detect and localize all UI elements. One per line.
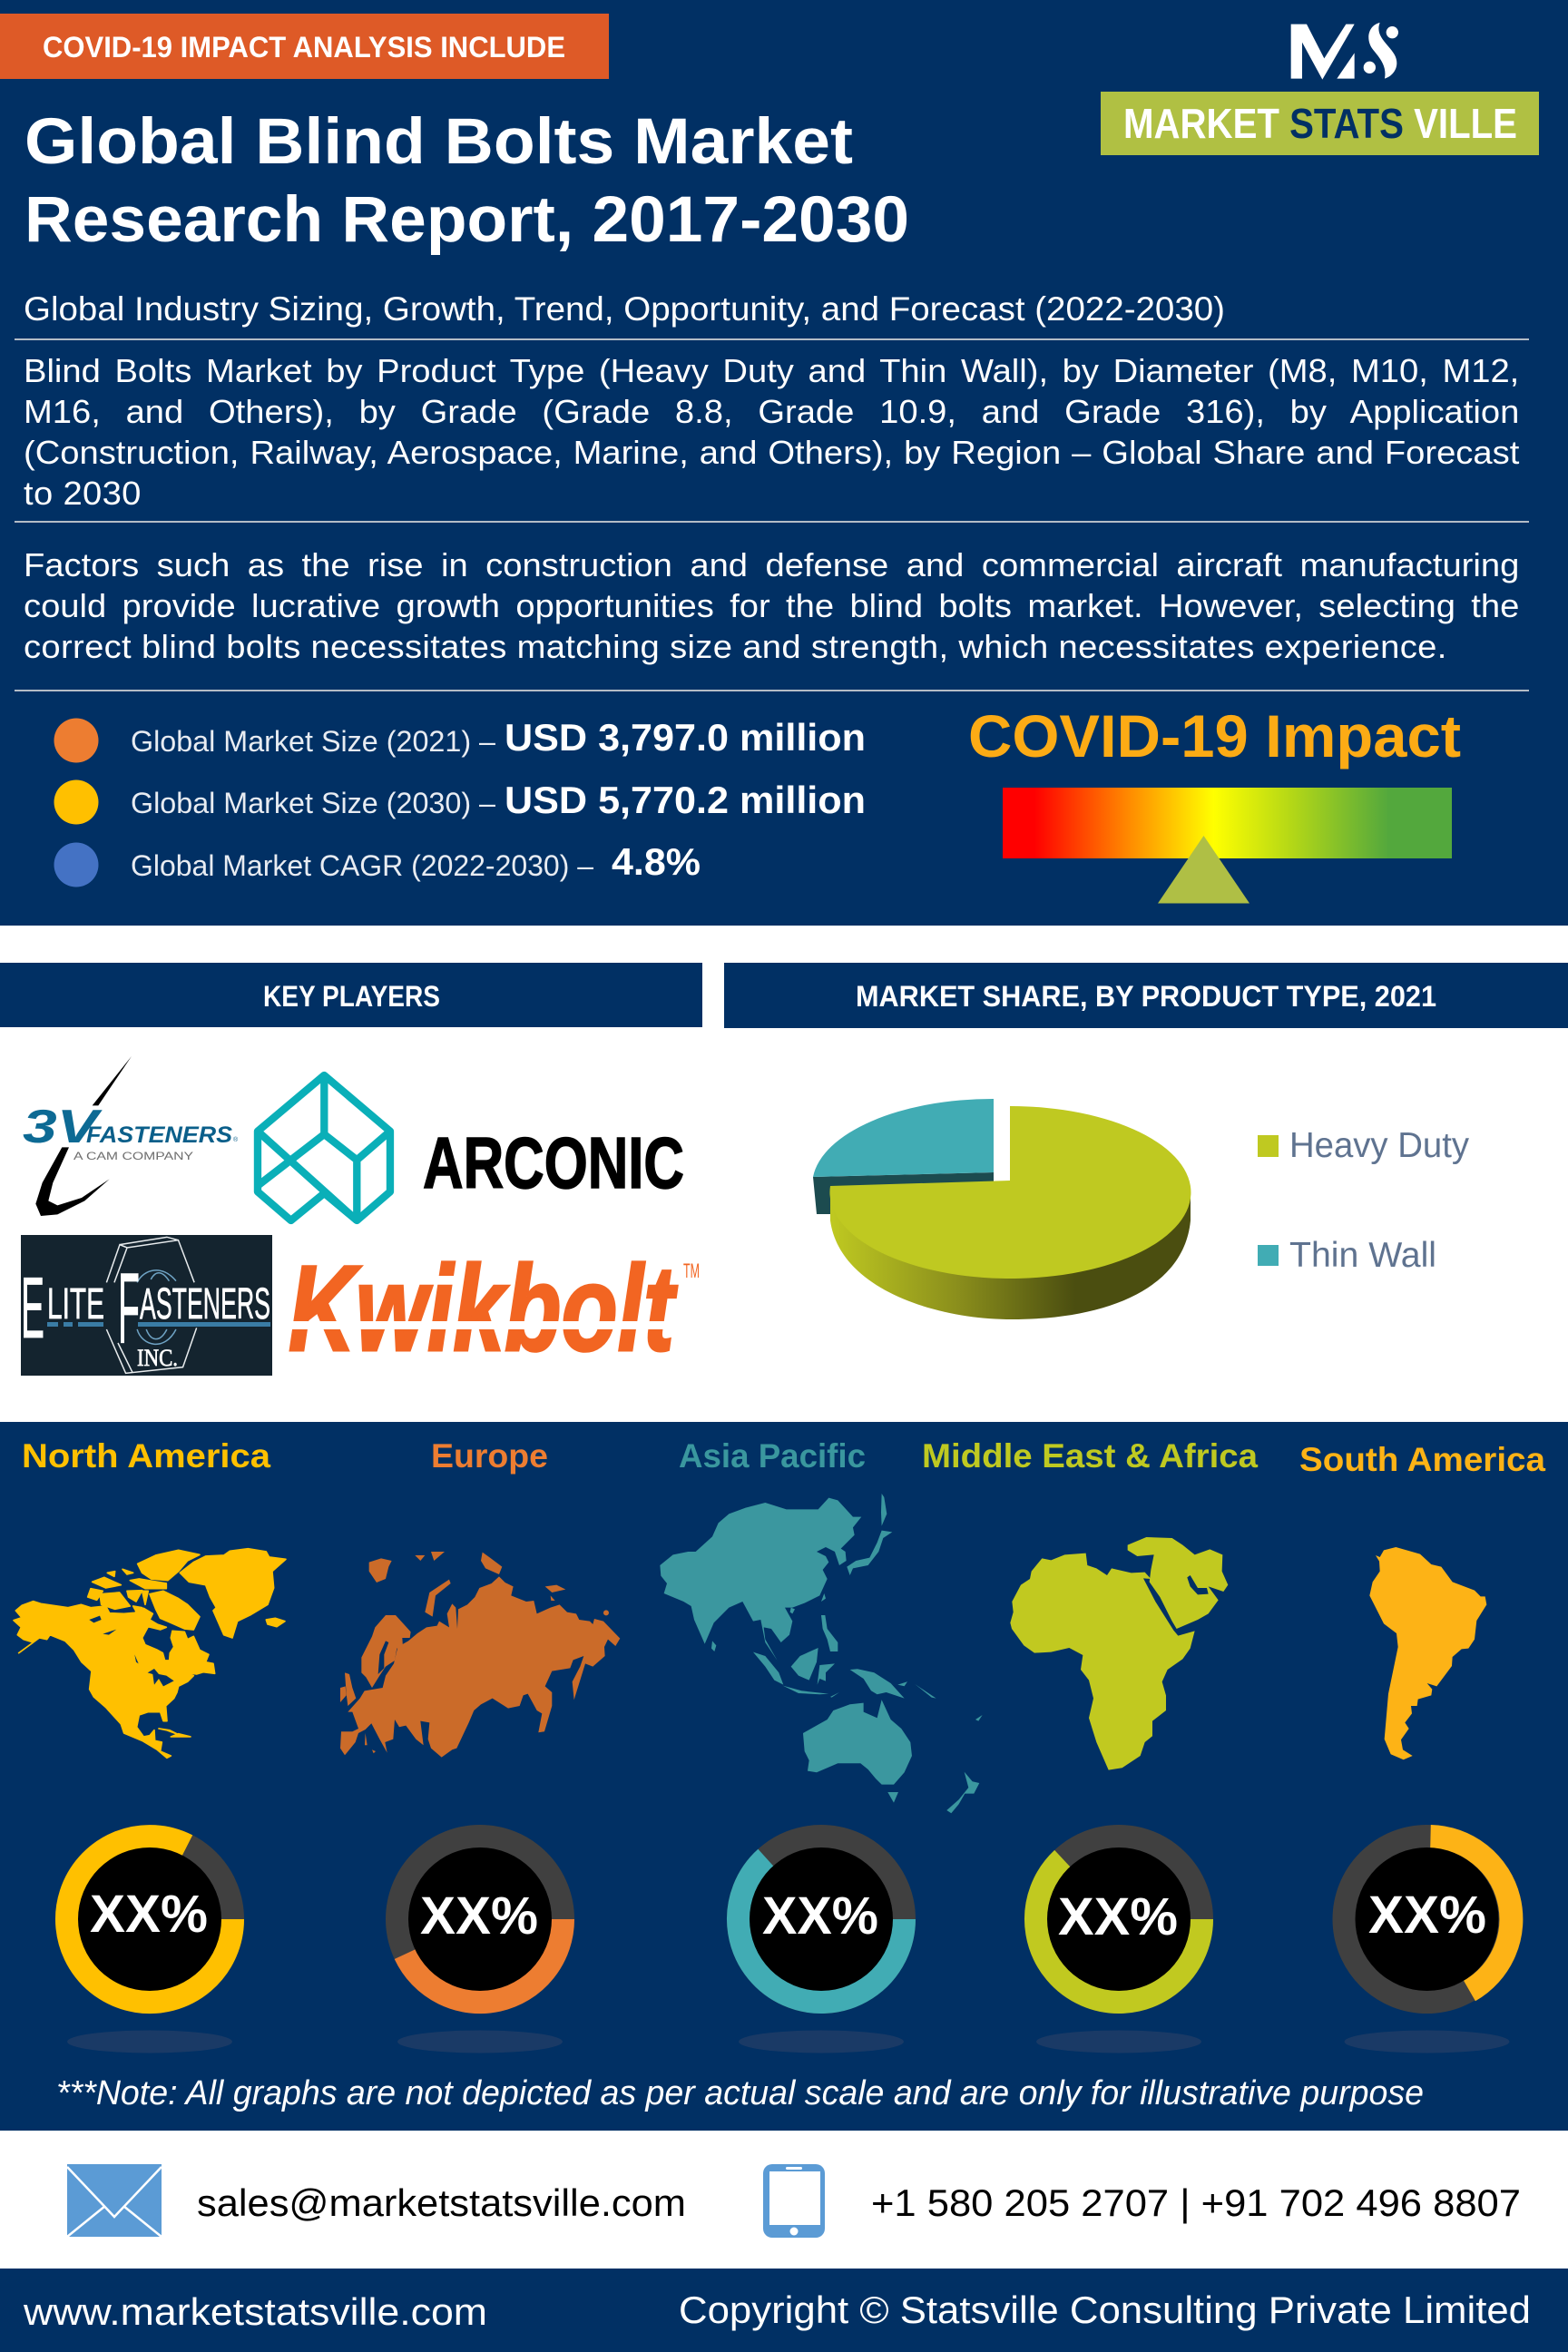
donut: Europe	[397, 1837, 563, 2002]
heading: North America: North America	[22, 1437, 270, 1475]
heading: South America: South America	[1299, 1441, 1545, 1478]
logo: Arconic: ARCONIC	[423, 1122, 684, 1203]
logo: 3V Fasteners: ®	[233, 1136, 239, 1143]
stat: market size 2030: USD 5,770.2 million	[505, 779, 866, 821]
key statistics	[54, 716, 866, 887]
text block: segmentation description	[24, 352, 1519, 512]
heading: Asia Pacific: Asia Pacific	[679, 1437, 866, 1475]
map: North America	[14, 1549, 286, 1758]
pie chart: market share by product type	[813, 1099, 1191, 1319]
map: Middle East and Africa	[1010, 1537, 1228, 1770]
text block: market factors	[24, 546, 1519, 665]
donut: Middle East and Africa	[1036, 1837, 1201, 2002]
icon: phone	[763, 2164, 825, 2238]
text block: market factors: could provide lucrative growth opportunities for the blind bolts market. However, selecting the	[24, 587, 1519, 624]
logo: 3V Fasteners: A CAM COMPANY	[74, 1150, 193, 1162]
text block: market factors: Factors such as the rise in construction and defense and commercial aircraft manufacturing	[24, 546, 1519, 583]
panel header: key players: KEY PLAYERS	[263, 980, 440, 1013]
covid-19 impact gauge	[968, 702, 1461, 904]
logo: 3V Fasteners	[23, 1056, 239, 1216]
donut: Asia Pacific	[739, 1837, 904, 2002]
logo: Elite Fasteners	[21, 1235, 272, 1376]
stat: market CAGR	[54, 840, 701, 887]
logo: 3V Fasteners: 3V	[23, 1101, 103, 1153]
panel header: key players	[0, 963, 702, 1027]
map: South America	[1369, 1547, 1486, 1759]
donut: Asia Pacific: XX%	[762, 1886, 878, 1945]
text block: segmentation description: Blind Bolts Market by Product Type (Heavy Duty and Thin Wall), by Diameter (M8, M10, M12,	[24, 352, 1519, 389]
donut: South America	[1345, 1837, 1511, 2002]
logo: Elite Fasteners: LITE	[47, 1280, 104, 1328]
legend: thin wall: Thin Wall	[1289, 1236, 1436, 1275]
donut shadows	[67, 2031, 1510, 2053]
donut: Middle East and Africa: XX%	[1058, 1887, 1178, 1946]
heading: Europe: Europe	[431, 1437, 548, 1475]
footer: copyright: Copyright © Statsville Consulting Private Limited	[679, 2288, 1531, 2331]
contact: phone numbers: +1 580 205 2707 | +91 702 496 8807	[871, 2181, 1521, 2224]
stat: market size 2021: USD 3,797.0 million	[505, 716, 866, 759]
pie slice: thin wall	[813, 1099, 994, 1214]
logo: Elite Fasteners: INC.	[137, 1345, 178, 1371]
text block: segmentation description: to 2030	[24, 475, 142, 512]
legend: heavy duty: Heavy Duty	[1289, 1126, 1469, 1165]
icon: email envelope	[67, 2164, 162, 2237]
regional panel background	[0, 1422, 1568, 2131]
note: ***Note: All graphs are not depicted as per actual scale and are only for illustrative purpose	[56, 2074, 1424, 2112]
logo: 3V Fasteners: FASTENERS	[86, 1122, 232, 1148]
logo: Elite Fasteners: F	[118, 1253, 140, 1365]
stat: market CAGR: 4.8%	[612, 840, 701, 883]
panel header: market share: MARKET SHARE, BY PRODUCT TYPE, 2021	[856, 980, 1436, 1013]
title: Global Blind Bolts Market	[24, 106, 853, 178]
donut: Europe: XX%	[420, 1886, 538, 1945]
map: Asia Pacific	[660, 1494, 983, 1813]
map: Europe	[340, 1552, 620, 1758]
stat: market CAGR: Global Market CAGR (2022-2030) –	[131, 849, 593, 882]
logo: Elite Fasteners: E	[21, 1259, 44, 1357]
text block: segmentation description: (Construction, Railway, Aerospace, Marine, and Others), by Region – Global Share and Forecast	[24, 434, 1519, 471]
logo: Kwikbolt: Kwikbolt	[289, 1241, 678, 1377]
logo: Market Stats Ville	[1101, 23, 1539, 155]
text block: segmentation description: M16, and Others), by Grade (Grade 8.8, Grade 10.9, and Grade 316), by Application	[24, 393, 1519, 430]
heading: Middle East and Africa: Middle East & Africa	[922, 1437, 1258, 1475]
donut: North America: XX%	[90, 1885, 208, 1944]
logo: Kwikbolt: TM	[683, 1259, 700, 1282]
logo: Market Stats Ville: MARKET STATS VILLE	[1123, 100, 1517, 147]
stat: market size 2021	[54, 716, 866, 762]
title: Research Report, 2017-2030	[24, 184, 909, 256]
header background panel	[0, 0, 1568, 926]
covid-19 impact gauge: COVID-19 Impact	[968, 702, 1461, 769]
panel header: market share	[724, 963, 1568, 1028]
footer bar	[0, 2269, 1568, 2352]
contact: email: sales@marketstatsville.com	[197, 2181, 686, 2224]
stat: market size 2021: Global Market Size (2021) –	[131, 725, 495, 758]
title	[24, 106, 909, 256]
stat: market size 2030: Global Market Size (2030) –	[131, 787, 495, 819]
text block: market factors: correct blind bolts necessitates matching size and strength, which necessitates experience.	[24, 628, 1447, 665]
covid analysis banner	[0, 14, 609, 79]
logo: Elite Fasteners: ASTENERS	[140, 1280, 270, 1328]
donut: North America	[67, 1837, 232, 2002]
stat: market size 2030	[54, 779, 866, 824]
logo: Arconic	[258, 1075, 684, 1220]
footer: website: www.marketstatsville.com	[23, 2290, 487, 2333]
covid analysis banner: COVID-19 IMPACT ANALYSIS INCLUDE	[43, 31, 565, 64]
pie slice: heavy duty	[829, 1106, 1191, 1319]
donut: South America: XX%	[1368, 1886, 1486, 1945]
subtitle: Global Industry Sizing, Growth, Trend, Opportunity, and Forecast (2022-2030)	[24, 290, 1225, 328]
